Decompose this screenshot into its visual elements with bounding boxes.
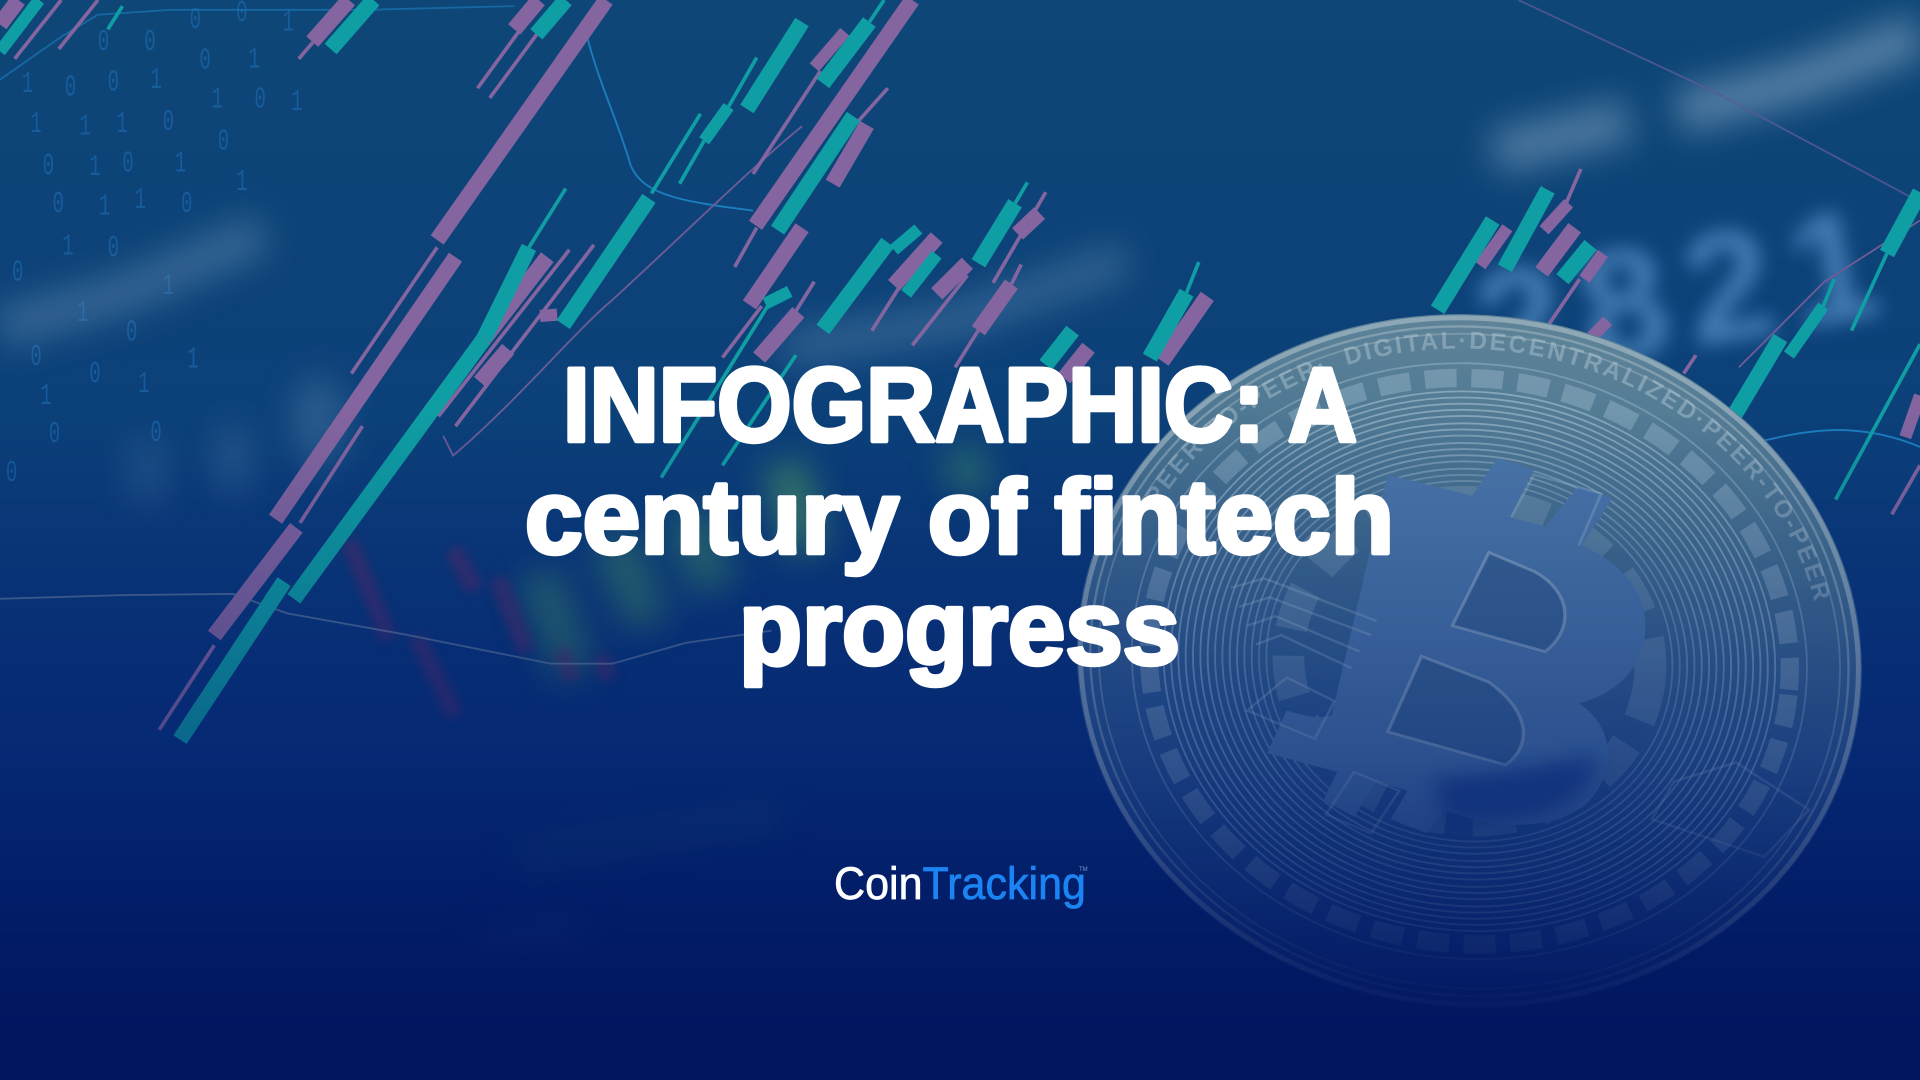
binary digits: 1 <box>187 342 199 377</box>
logo: CoinTracking: TM <box>1079 867 1088 873</box>
binary digits: 0 <box>144 25 156 60</box>
binary digits: 0 <box>126 315 137 350</box>
blurred green candles <box>478 453 980 943</box>
binary digits: 0 <box>30 340 42 375</box>
blurred background shapes <box>0 34 1920 508</box>
coin rim inscription: PEER-TO-PEER· DIGITAL·DECENTRALIZED·PEER-TO-PEER <box>1144 332 1830 601</box>
binary digits: 0 <box>12 255 23 290</box>
coin rim and rings <box>1077 314 1862 992</box>
binary digits: 0 <box>52 187 64 221</box>
binary digits: 0 <box>108 65 119 100</box>
binary digits: 1 <box>175 146 186 181</box>
binary digits: 1 <box>163 269 174 303</box>
blurred red candles <box>349 541 610 716</box>
binary digits: 0 <box>6 456 17 491</box>
binary digits: 1 <box>40 379 52 414</box>
binary digits: 1 <box>138 367 150 401</box>
dark recess under the symbol <box>1433 753 1596 821</box>
bitcoin coin <box>1077 314 1862 992</box>
binary digits: 1 <box>89 150 101 185</box>
binary digits: 0 <box>150 416 162 450</box>
binary digits: 0 <box>199 43 211 78</box>
binary digits: 1 <box>79 109 91 144</box>
title: progress <box>739 570 1180 687</box>
title <box>525 347 1394 687</box>
binary digits: 0 <box>49 417 60 452</box>
logo: CoinTracking: CoinTracking <box>834 858 1086 909</box>
binary digits: 0 <box>98 25 109 60</box>
bitcoin symbol <box>1231 458 1809 857</box>
binary digits: 0 <box>218 124 229 159</box>
binary digits: 0 <box>89 357 101 392</box>
blurred background shapes: 2821 <box>1462 174 1891 417</box>
binary digits: 1 <box>291 85 303 120</box>
title: INFOGRAPHIC: A <box>563 347 1357 464</box>
binary digits: 0 <box>163 105 174 139</box>
binary digits: 1 <box>236 165 248 199</box>
binary digits: 1 <box>30 107 42 142</box>
binary digits: 1 <box>283 5 294 40</box>
binary digits: 0 <box>65 70 76 105</box>
purple candlesticks <box>0 0 1920 730</box>
binary digits: 1 <box>150 63 162 98</box>
binary digits: 0 <box>190 3 201 38</box>
binary digits <box>6 0 303 491</box>
binary digits: 1 <box>99 189 110 224</box>
binary digits: 1 <box>62 229 74 264</box>
thin chart lines <box>0 0 1920 664</box>
stepped maze blocks <box>1231 475 1809 857</box>
binary digits: 0 <box>122 146 134 181</box>
binary digits: 1 <box>22 67 33 101</box>
binary digits: 0 <box>181 187 192 221</box>
teal candlesticks <box>0 0 1920 740</box>
binary digits: 0 <box>108 231 119 266</box>
title: century of fintech <box>525 459 1394 576</box>
binary digits: 1 <box>212 83 223 117</box>
binary digits: 1 <box>248 42 260 77</box>
binary digits: 0 <box>255 83 266 117</box>
binary digits: 1 <box>135 183 146 218</box>
binary digits: 1 <box>77 296 88 330</box>
binary digits: 0 <box>43 149 54 183</box>
binary digits: 1 <box>116 107 128 142</box>
